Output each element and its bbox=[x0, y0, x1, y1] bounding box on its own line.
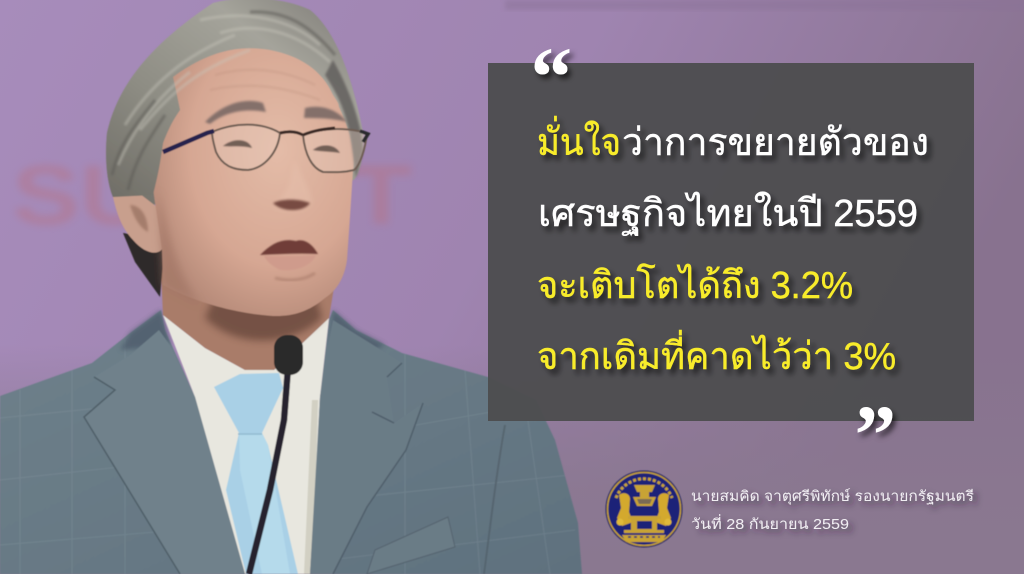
line 1: มั่นใจ bbox=[537, 116, 621, 164]
jacket right lapel bbox=[310, 320, 423, 574]
dark collar shading bbox=[120, 310, 385, 365]
hair back bbox=[106, 0, 363, 205]
date: วันที่ 28 กันยายน 2559 bbox=[691, 514, 849, 533]
opening quotation mark: “ bbox=[530, 31, 572, 125]
hair front strands bbox=[106, 0, 363, 197]
speaker name: นายสมคิด จาตุศรีพิทักษ์ รองนายกรัฐมนตรี bbox=[691, 488, 974, 505]
glasses frame dark tops bbox=[163, 131, 214, 152]
suit plaid texture bbox=[20, 416, 545, 543]
line 1 bbox=[537, 116, 929, 164]
shirt bbox=[163, 315, 329, 574]
necktie bbox=[214, 373, 298, 574]
shirt shadow bbox=[304, 400, 318, 574]
glasses bbox=[212, 125, 367, 172]
line 2: เศรษฐกิจไทยในปี 2559 bbox=[538, 192, 918, 236]
line 4: จากเดิมที่คาดไว้ว่า 3% bbox=[537, 330, 896, 378]
neck bbox=[160, 250, 340, 370]
pocket flap bbox=[367, 517, 455, 574]
face bbox=[153, 47, 354, 316]
blurred stage sign text: SUMMIT bbox=[12, 148, 412, 242]
forehead lines bbox=[210, 70, 320, 100]
jacket left lapel bbox=[84, 330, 245, 574]
eyebrows bbox=[205, 101, 266, 124]
dark hair behind ear bbox=[123, 233, 165, 297]
line 3: จะเติบโตได้ถึง 3.2% bbox=[537, 263, 853, 307]
mouth bbox=[260, 240, 318, 255]
attribution text bbox=[691, 488, 974, 533]
cheek shading bbox=[158, 190, 200, 305]
quote text bbox=[537, 116, 929, 378]
photo: speaker at podium bbox=[0, 0, 582, 574]
suit jacket bbox=[0, 310, 582, 574]
eyes bbox=[223, 140, 252, 148]
microphone bbox=[249, 368, 288, 574]
hair highlights bbox=[118, 16, 330, 165]
icon: government seal bbox=[606, 470, 682, 548]
nose bbox=[273, 160, 312, 211]
ear bbox=[113, 189, 163, 253]
closing quotation mark: ” bbox=[854, 389, 896, 483]
line 1: ว่าการขยายตัวของ bbox=[622, 122, 929, 164]
sleeve seam bbox=[484, 425, 505, 574]
dark hair at temple bbox=[325, 60, 363, 178]
panel: quote box bbox=[488, 63, 974, 421]
